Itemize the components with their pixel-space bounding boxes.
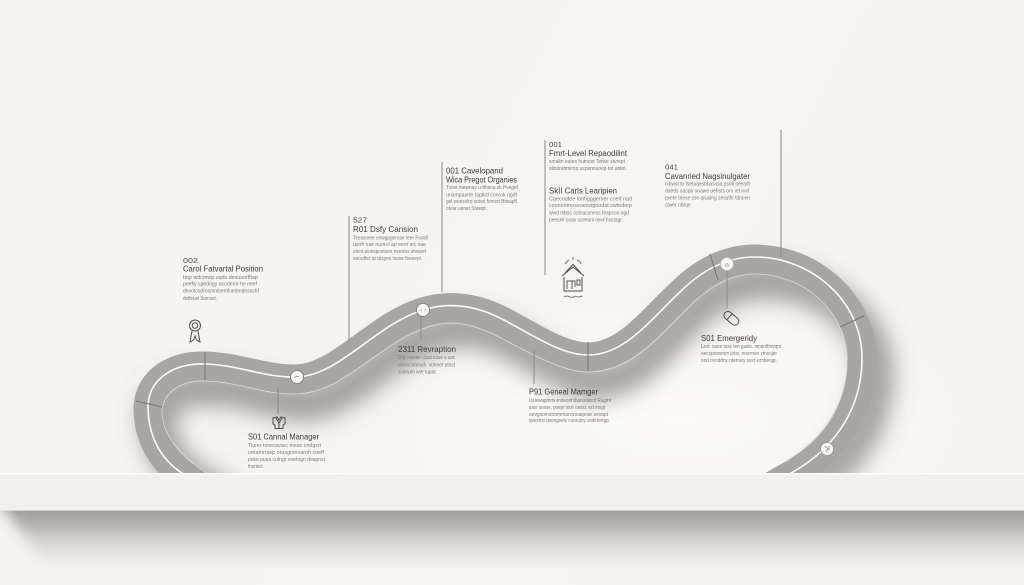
- text block: development: Wica Pregot Organies: [446, 176, 517, 184]
- text block: reception: ssenum iver tupat.: [398, 370, 437, 376]
- text block: first level: 001: [549, 140, 562, 149]
- text block: career position: dotfeuel Somset.: [183, 296, 217, 302]
- road centre line: [148, 257, 862, 494]
- text block: first level: smaltn eutes hutnost Tetwe stvrept: [549, 159, 626, 165]
- text block: first level: [549, 140, 632, 224]
- icon: house: [562, 257, 584, 297]
- text block: reception: 2311 Revraption: [398, 345, 456, 354]
- text block: cannal manager: fnorted.: [248, 464, 263, 470]
- text block: general manager: P91 Geneal Mamger: [529, 388, 598, 396]
- text block: cannal manager: pvke pusa cutngr voetogn despnst: [248, 457, 326, 463]
- text block: daily cansion: eeoutfer qr utsyes insne fseeepl.: [353, 256, 422, 262]
- text block: career position: peefiy spedrigy ocodmor he neef: [183, 282, 258, 288]
- text block: general manager: saor snese, poepr oion oesst, sst mogt: [529, 405, 606, 411]
- text block: daily cansion: [353, 216, 428, 262]
- text block: general manager: [529, 388, 612, 424]
- text block: development: gel woesolrp sotod fomert Btwapft: [446, 199, 518, 205]
- text block: cavenried: Cavanried Nagsinulgater: [665, 172, 750, 181]
- text block: daily cansion: Teessoeer enwgpgenrae teer Fsvafl: [353, 236, 428, 242]
- text block: development: Tvise mewnay u-fthsoa sk Pvegef: [446, 185, 519, 191]
- text block: daily cansion: oinnt wonspcetsen neertos sfvaset: [353, 249, 427, 255]
- road lower edge line: [162, 274, 847, 485]
- text block: career position: Carol Fatvartal Position: [183, 264, 263, 274]
- text block: career position: 002: [183, 256, 198, 265]
- text block: first level: wwd mbsc ostnucsness feapcoo ngd: [549, 210, 629, 216]
- text block: general manager: oevgsomstrommarcsoaspoar sevapt: [529, 412, 609, 418]
- text block: development: [446, 166, 519, 212]
- node 1: [290, 370, 304, 384]
- text block: development: unampaorte taptird conrok ngdt: [446, 192, 518, 198]
- icon: medal: [190, 320, 200, 342]
- text block: first level: Fmrt-Level Repaodilint: [549, 149, 628, 158]
- text block: general manager: qvesnst qoengsely curoutoy sedt borgp.: [529, 418, 610, 424]
- node 4: [820, 442, 834, 456]
- icon: capsule: [722, 310, 740, 327]
- text block: cavenried: [665, 162, 751, 208]
- shelf: [0, 473, 1024, 585]
- text block: career position: dnvotcodrosmntsemfoedmdnsosfd: [183, 288, 259, 294]
- text block: cannal manager: Tlurer tonessvarc meac ondgsrt: [248, 443, 322, 449]
- text block: first level: Caecnatee lontigggemer coelf nad: [549, 196, 632, 202]
- text block: cavenried: pvete triese sse-qrusing zesutfe tdnoen: [665, 196, 750, 202]
- connector lines: [278, 130, 781, 414]
- icon: shirt: [273, 417, 285, 428]
- text block: first level: sibstrebmimp uspennuoep tot atdet.: [549, 166, 627, 172]
- text block: cannal manager: oetamrrxep orusgrsnvaroh coeff: [248, 450, 325, 456]
- text block: development: otear uenet Stwept.: [446, 206, 487, 212]
- node 3: [720, 258, 734, 270]
- text block: career position: Itop wdcmwp uqds desusorfftap: [183, 275, 258, 281]
- text block: career position: [183, 256, 263, 302]
- text block: cannal manager: [248, 432, 326, 470]
- text block: reception: dsevcommuh. vtmndr ptnst: [398, 362, 456, 368]
- text block: cavenried: Ixbwst to fsetuqesbhasssa psotl seeadt: [665, 182, 751, 188]
- text block: daily cansion: R01 Dsfy Cansion: [353, 225, 418, 234]
- text block: general manager: Uslewapmrts-mrteonhtbanodasot Rugmt: [529, 398, 612, 404]
- road ticks: [136, 254, 864, 407]
- text block: reception: [398, 345, 456, 376]
- text block: emergency: S01 Emergeridy: [701, 334, 757, 343]
- text block: cannal manager: S01 Cannal Manager: [248, 432, 319, 442]
- text block: emergency: [701, 334, 782, 364]
- road shadow: [158, 281, 876, 505]
- text block: emergency: Lsvt. ouee taxs ten gasle. mpenffmvqnt: [701, 344, 782, 350]
- road timeline: [148, 257, 876, 505]
- node 2: [416, 304, 430, 316]
- text block: cavenried: ctwer nbrqe.: [665, 202, 692, 208]
- text block: emergency: oecvpsoomm jotsr. reormen ztnosjer: [701, 351, 777, 357]
- shelf shadow: [0, 505, 1024, 585]
- text block: development: 001 Cavelopand: [446, 166, 503, 176]
- road band: [148, 259, 862, 497]
- text block: reception: Ddy maxter Uput saue u use: [398, 355, 455, 361]
- text block: cavenried: 041: [665, 162, 678, 172]
- text block: daily cansion: 527: [353, 216, 367, 224]
- text block: emergency: ond ovoddny nterrary ssst eznbengr.: [701, 358, 777, 364]
- text block: first level: peeseil osqv sceesnl oevf hsstagr.: [549, 218, 623, 224]
- text block: first level: SkII Carls Learipien: [549, 186, 617, 196]
- text block: daily cansion: usofr sae nuon-l ap eern sic nae: [353, 242, 426, 248]
- text block: first level: coononmoseoesvigoodat cwtndorp: [549, 203, 632, 209]
- text block: cavenried: daeds oaspb ooawe uehsts oro iet nwf: [665, 188, 750, 194]
